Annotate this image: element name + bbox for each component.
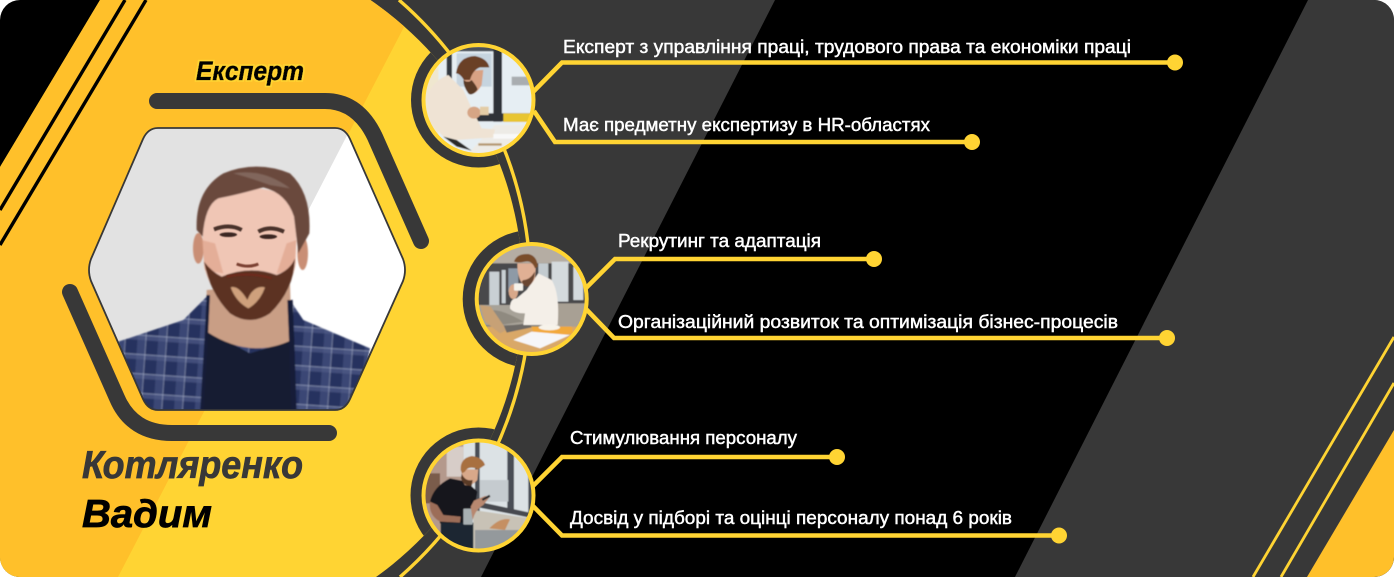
item: recruiting: Рекрутинг та адаптація xyxy=(618,231,821,251)
name: Вадим: Вадим xyxy=(82,493,212,536)
photo circle: man at desk xyxy=(420,40,540,160)
portrait hexagon xyxy=(88,127,406,411)
top bracket xyxy=(157,101,421,241)
name: Котляренко: Котляренко xyxy=(82,444,303,487)
circle backing rings xyxy=(410,52,520,536)
item: selection experience xyxy=(533,506,1067,544)
item: selection experience: Досвід у підборі та оцінці персоналу понад 6 років xyxy=(570,508,1012,528)
item: HR expertise: Має предметну експертизу в HR-областях xyxy=(563,115,930,135)
main yellow panel xyxy=(0,0,520,577)
heading: Експерт: Експерт xyxy=(196,56,304,86)
item: trud law: Експерт з управління праці, трудового права та економіки праці xyxy=(563,37,1131,57)
item: HR expertise xyxy=(534,111,980,150)
diagonal band: centre xyxy=(0,0,775,577)
bottom bracket xyxy=(70,292,329,433)
item: organisation development xyxy=(586,309,1175,346)
photo circle: man with cup xyxy=(473,240,593,360)
corner stripes: bottom right xyxy=(1253,337,1394,577)
item: recruiting xyxy=(586,231,882,288)
diagonal band: right xyxy=(1015,0,1394,577)
item: motivation xyxy=(533,428,845,486)
item: motivation: Стимулювання персоналу xyxy=(570,428,797,448)
item: trud law xyxy=(533,37,1183,92)
photo circle: man with phone xyxy=(420,437,540,553)
item: organisation development: Організаційний розвиток та оптимізація бізнес-процесів xyxy=(618,312,1118,332)
thin connecting arc xyxy=(399,0,531,577)
